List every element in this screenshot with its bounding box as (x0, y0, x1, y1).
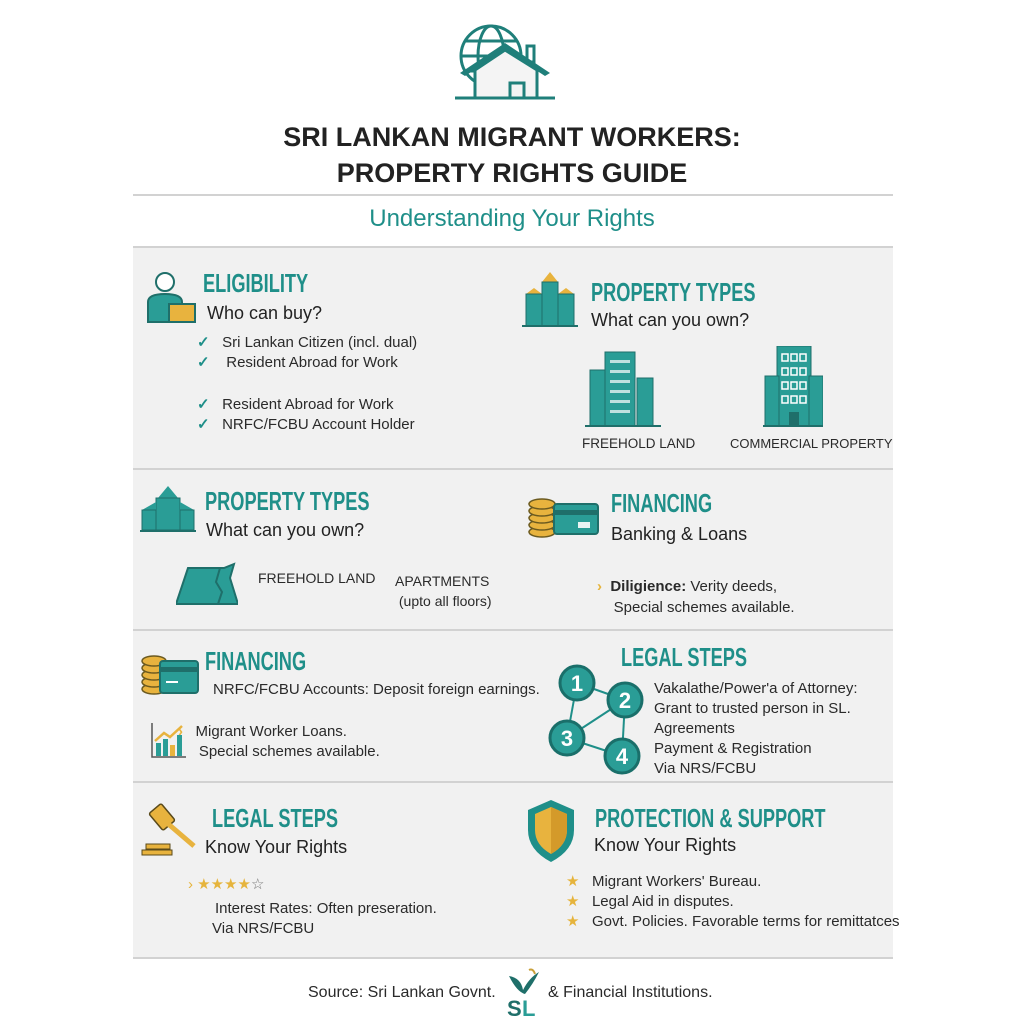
icon: commercial building (763, 346, 823, 427)
panel: legal steps rights: Know Your Rights (205, 837, 347, 857)
checklist: ✓ Resident Abroad for Work (197, 354, 398, 371)
panel: eligibility (147, 268, 417, 433)
icon: numbered network: 2 (619, 688, 631, 713)
footer: source (308, 968, 713, 1018)
panel: protection and support: PROTECTION & SUPPORT (595, 803, 826, 833)
title: PROPERTY RIGHTS GUIDE (337, 158, 687, 188)
panel: protection and support (528, 800, 900, 930)
panel: property types top: COMMERCIAL PROPERTY (730, 436, 893, 451)
icon: land (176, 562, 238, 605)
panel: legal steps rights: Interest Rates: Often preseration. (215, 900, 437, 917)
panel: legal steps rights: › ★★★★☆ (188, 876, 264, 893)
icon: gavel (142, 804, 196, 856)
panel: property types top: PROPERTY TYPES (591, 277, 756, 307)
panel: protection and support: ★ Legal Aid in disputes. (566, 893, 734, 910)
panel: eligibility: Who can buy? (207, 303, 322, 323)
panel: financing third: › Migrant Worker Loans. (178, 723, 347, 740)
footer: source: & Financial Institutions. (548, 984, 713, 1001)
panel: property types second: PROPERTY TYPES (205, 486, 370, 516)
panel: financing second: Banking & Loans (611, 524, 747, 544)
subtitle: Understanding Your Rights (369, 205, 655, 232)
icon: house (140, 486, 196, 532)
panel: property types top: FREEHOLD LAND (582, 436, 695, 451)
panel: financing third: Special schemes available. (199, 743, 380, 760)
icon: numbered network: 1 (571, 671, 583, 696)
icon: numbered network: 3 (561, 726, 573, 751)
icon: coins and card (141, 655, 199, 695)
panel: financing third: NRFC/FCBU Accounts: Deposit foreign earnings. (213, 681, 540, 698)
icon: numbered network: 4 (616, 744, 629, 769)
panel: protection and support: ★ Govt. Policies. Favorable terms for remittatces (566, 913, 900, 930)
icon: buildings (522, 272, 578, 327)
panel: legal steps numbered: Payment & Registration (654, 740, 812, 757)
panel: eligibility: ✓ Resident Abroad for Work (197, 396, 394, 413)
icon: globe house logo (455, 24, 555, 100)
panel: legal steps numbered: Via NRS/FCBU (654, 760, 756, 777)
icon: coins and card (528, 498, 599, 538)
footer: source: Source: Sri Lankan Govnt. (308, 984, 496, 1001)
panel: financing second: › Diligience: Verity deeds, (597, 578, 777, 595)
panel: property types second: APARTMENTS (395, 573, 489, 589)
title (283, 122, 741, 188)
checklist: ✓ Sri Lankan Citizen (incl. dual) (197, 334, 417, 351)
panel: legal steps rights: LEGAL STEPS (212, 803, 338, 833)
panel: property types second (140, 486, 491, 609)
panel: eligibility: ✓ NRFC/FCBU Account Holder (197, 416, 415, 433)
panel: legal steps numbered: Grant to trusted person in SL. (654, 700, 851, 717)
panel: financing third: FINANCING (205, 646, 306, 676)
panel: property types top (522, 272, 893, 451)
panel: property types top: What can you own? (591, 310, 749, 330)
panel: legal steps numbered: Vakalathe/Power'a of Attorney: (654, 680, 858, 697)
icon: shield (528, 800, 574, 862)
panel: legal steps numbered: LEGAL STEPS (621, 642, 747, 672)
heading: ELIGIBILITY (203, 268, 308, 298)
panel: legal steps rights (142, 803, 437, 937)
icon: skyscraper (585, 352, 661, 427)
panel: legal steps rights: Via NRS/FCBU (212, 920, 314, 937)
panel: financing second: FINANCING (611, 488, 712, 518)
panel: protection and support: ★ Migrant Workers' Bureau. (566, 873, 761, 890)
panel: property types second: What can you own? (206, 520, 364, 540)
panel: property types second: FREEHOLD LAND (258, 570, 375, 586)
icon: person with briefcase (147, 272, 196, 323)
icon: chart (151, 723, 186, 758)
panel: property types second: (upto all floors) (399, 593, 491, 609)
panel: protection and support: Know Your Rights (594, 835, 736, 855)
panel: financing second (528, 488, 795, 616)
panel: financing third (141, 646, 540, 760)
panel: legal steps numbered: Agreements (654, 720, 735, 737)
checklist (197, 334, 417, 371)
panel: legal steps numbered (548, 642, 858, 777)
icon: numbered network (548, 664, 644, 774)
icon: SL bird logo (507, 968, 539, 1018)
panel background (133, 248, 893, 958)
title: SRI LANKAN MIGRANT WORKERS: (283, 122, 741, 152)
panel: financing second: Special schemes available. (614, 599, 795, 616)
